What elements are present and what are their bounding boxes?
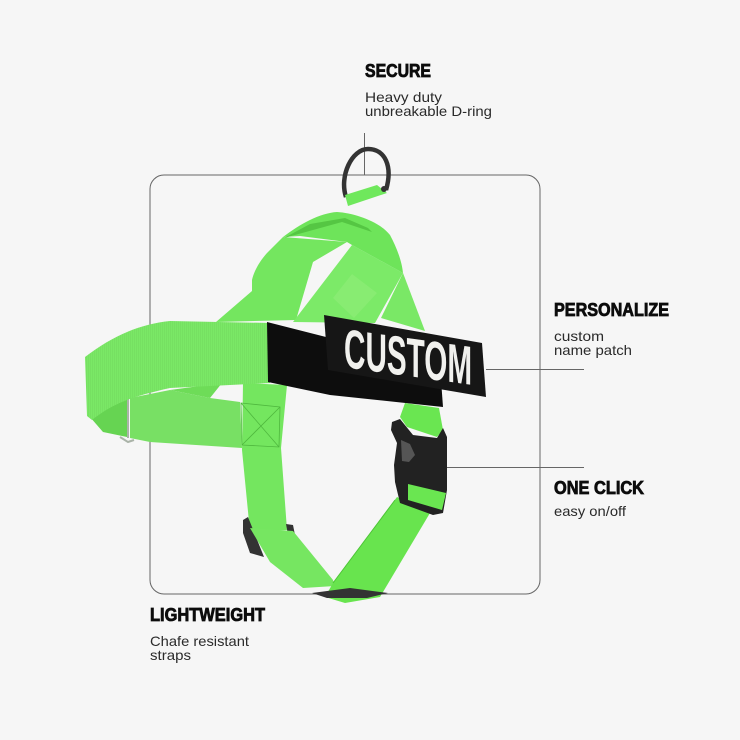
label: personalize (554, 300, 669, 358)
text: lightweight description: straps (150, 647, 191, 663)
text: personalize description (554, 328, 632, 358)
upper buckle strap (400, 403, 443, 437)
hanging vertical strap (241, 383, 287, 532)
patch text: CUSTOM (344, 319, 472, 397)
heading: personalize: PERSONALIZE (554, 300, 669, 320)
lower slider buckle (243, 517, 264, 557)
text: secure description: Heavy duty (365, 89, 442, 105)
velcro panel (267, 322, 443, 407)
text: secure description: unbreakable D-ring (365, 103, 492, 119)
frame and leader lines (150, 133, 584, 594)
top yoke (283, 212, 403, 273)
rear band (130, 383, 242, 448)
bottom slider (312, 588, 388, 598)
band inner fold (90, 399, 127, 437)
text: secure description (365, 89, 492, 119)
text: lightweight description (150, 633, 249, 663)
harness illustration (85, 149, 486, 603)
text: personalize description: name patch (554, 342, 632, 358)
text: one click description: easy on/off (554, 503, 626, 519)
text: lightweight description: Chafe resistant (150, 633, 249, 649)
label: lightweight (150, 605, 265, 663)
label: secure (365, 61, 492, 119)
icon: D-ring (344, 149, 389, 206)
name patch (324, 315, 486, 397)
lower left strap (250, 528, 335, 588)
metal slider (120, 398, 134, 442)
text: personalize description: custom (554, 328, 604, 344)
weave texture (85, 321, 270, 420)
heading: secure: SECURE (365, 61, 431, 81)
left shoulder strap (216, 237, 347, 322)
rear centre strap with label (293, 245, 425, 331)
label: one click (554, 478, 644, 519)
heading: one click: ONE CLICK (554, 478, 644, 498)
heading: lightweight: LIGHTWEIGHT (150, 605, 265, 625)
side release buckle (391, 419, 447, 515)
front band (85, 321, 270, 420)
lower right strap (325, 497, 430, 603)
